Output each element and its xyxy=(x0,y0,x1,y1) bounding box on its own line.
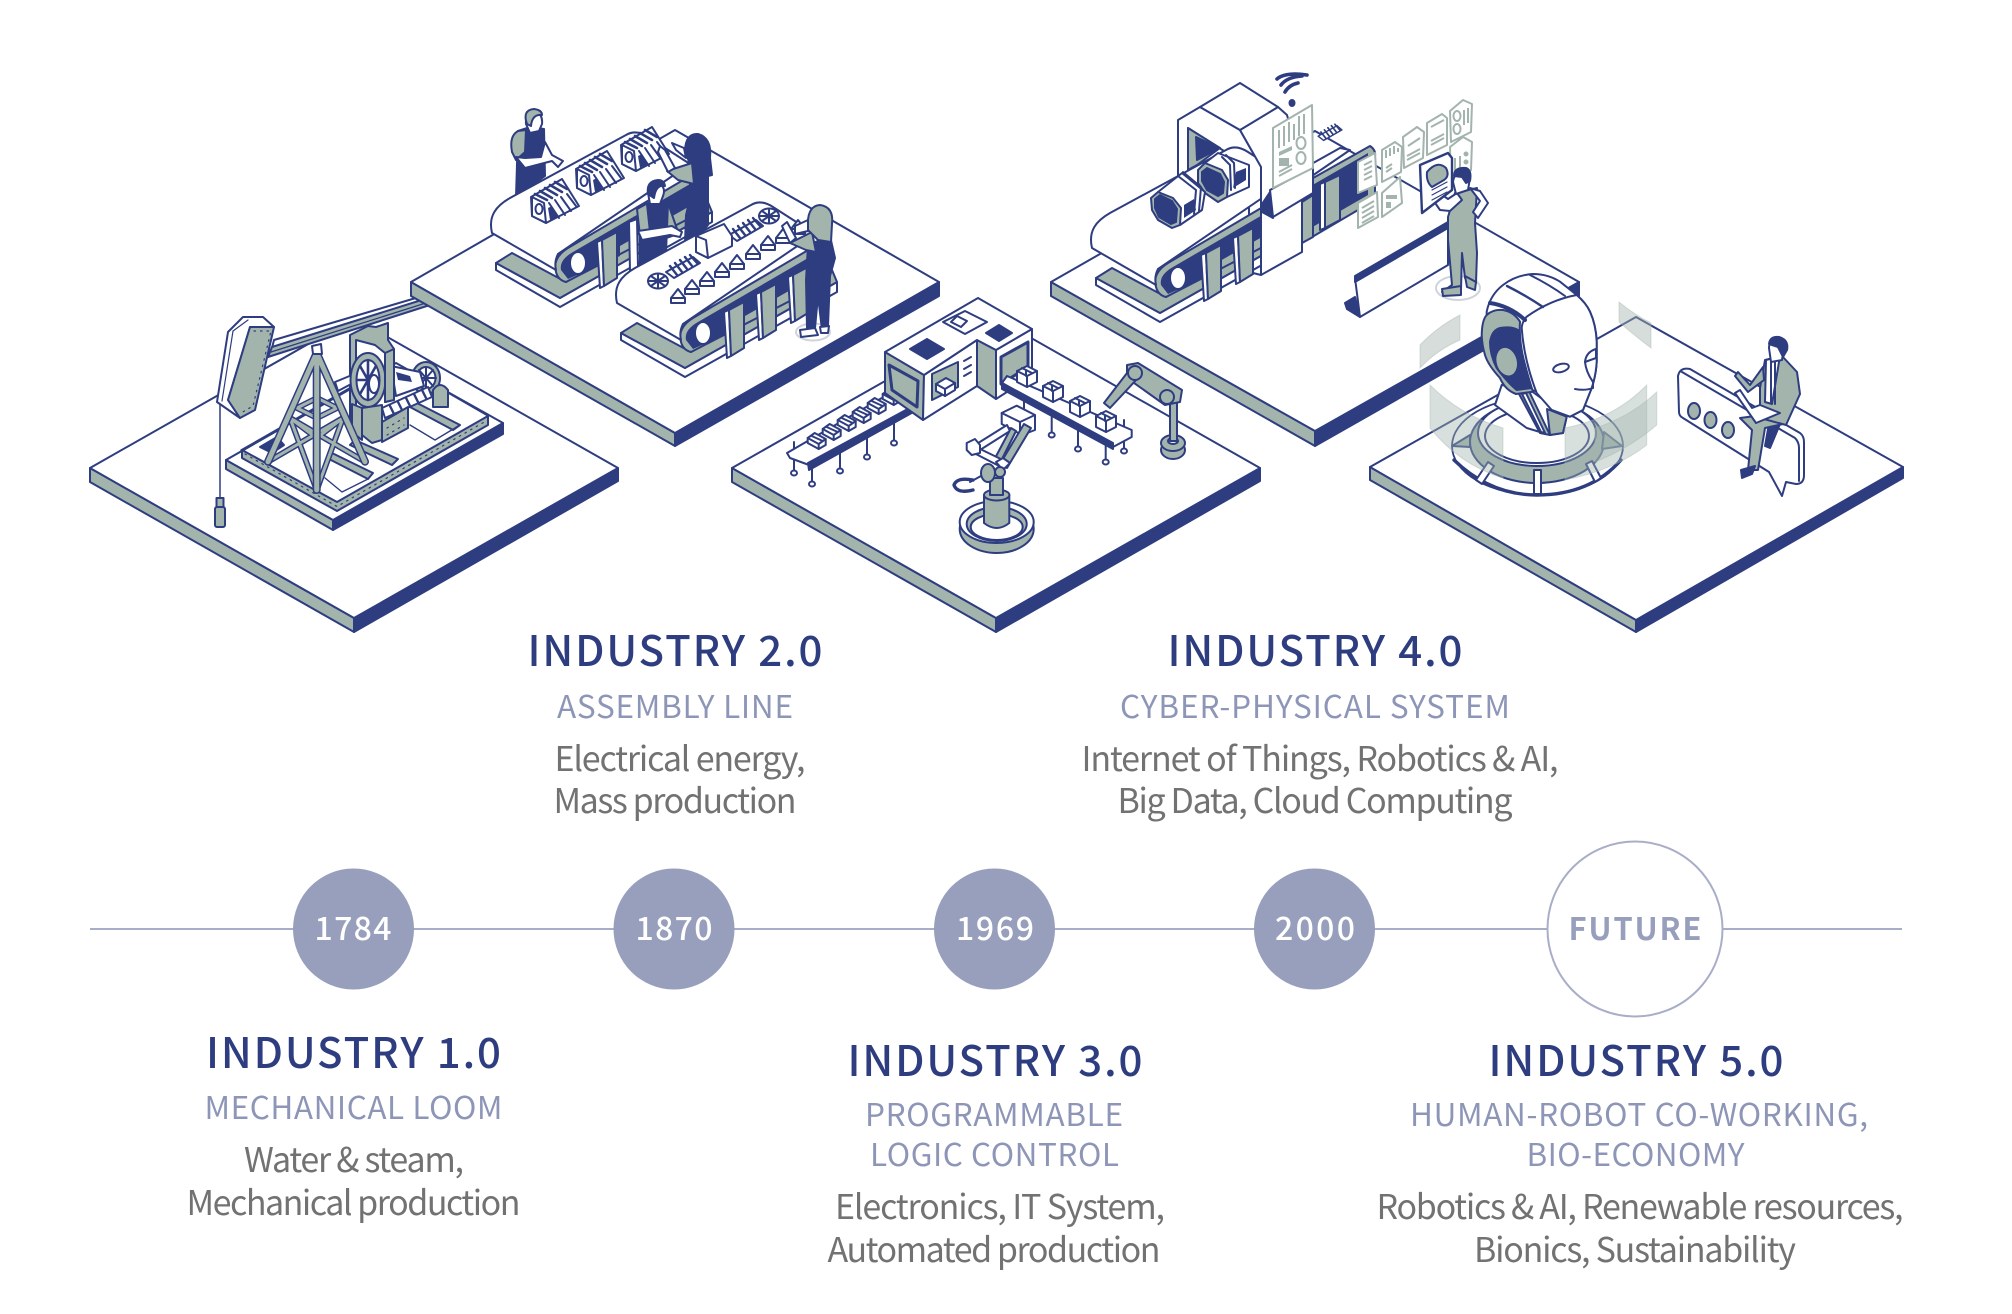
platform: Industry 5.0 xyxy=(1370,317,1903,632)
conveyor two xyxy=(616,202,837,377)
text block: Industry 4.0: Big Data, Cloud Computing xyxy=(1118,774,1512,823)
worker woman in navy xyxy=(658,134,712,243)
future marker xyxy=(1548,842,1722,1016)
text block: Industry 2.0: Electrical energy, xyxy=(554,732,806,781)
speech bubble xyxy=(1678,369,1804,496)
text block: Industry 2.0 xyxy=(528,618,822,823)
engine on conveyor behind gate xyxy=(1318,124,1342,140)
scanner gate rear xyxy=(1178,107,1261,275)
illustration: assembly line xyxy=(491,109,837,377)
robot base ring xyxy=(1452,397,1623,495)
conveyor two legs xyxy=(724,267,808,358)
conveyor legs left xyxy=(791,412,897,486)
cameras xyxy=(1151,153,1249,228)
pumpjack walking beam xyxy=(268,295,430,357)
year marker 1784: 1784 xyxy=(314,904,392,950)
worker in front of belt xyxy=(637,180,682,270)
centre robot arm xyxy=(954,406,1035,553)
dashboard main panel xyxy=(1273,105,1313,188)
year marker 1870: 1870 xyxy=(636,904,712,950)
year marker 1870 xyxy=(614,868,734,990)
left conveyor xyxy=(787,395,917,470)
worker woman at right xyxy=(782,205,835,340)
year marker 1784 xyxy=(293,868,414,990)
control machine xyxy=(885,298,1032,420)
text block: Industry 1.0 xyxy=(186,1020,520,1225)
platform: Industry 4.0 xyxy=(1051,131,1579,446)
year marker 1969 xyxy=(934,868,1055,990)
text block: Industry 4.0: INDUSTRY 4.0 xyxy=(1168,618,1462,679)
platform: Industry 1.0 xyxy=(90,318,618,632)
timeline xyxy=(90,842,1902,1016)
future marker: FUTURE xyxy=(1568,904,1702,949)
gantry robot arm xyxy=(1104,363,1185,459)
right conveyor xyxy=(1002,376,1132,449)
conveyor two parts: triangles, gears, coils and box xyxy=(648,208,805,303)
holographic panels behind xyxy=(1420,302,1651,368)
text block: Industry 5.0: INDUSTRY 5.0 xyxy=(1488,1028,1784,1089)
pumpjack rope and weight xyxy=(215,405,225,527)
conveyor one xyxy=(491,132,712,307)
text block: Industry 4.0: Internet of Things, Robotics & AI, xyxy=(1082,732,1558,781)
conveyor legs right xyxy=(1021,395,1127,464)
text block: Industry 2.0: ASSEMBLY LINE xyxy=(557,682,793,728)
smart conveyor xyxy=(1091,147,1312,322)
floating data panels xyxy=(1358,100,1472,228)
worker with apron at back xyxy=(511,109,563,197)
illustration: oil pumpjack xyxy=(215,295,503,530)
year marker 1969: 1969 xyxy=(956,904,1034,950)
text block: Industry 3.0: LOGIC CONTROL xyxy=(870,1130,1119,1176)
pumpjack base frame xyxy=(226,363,503,530)
text block: Industry 3.0: PROGRAMMABLE xyxy=(865,1090,1123,1136)
text block: Industry 5.0: BIO-ECONOMY xyxy=(1526,1130,1745,1176)
platform: Industry 3.0 xyxy=(732,318,1260,632)
gate front pillar and flap xyxy=(1200,83,1313,275)
text block: Industry 4.0: CYBER-PHYSICAL SYSTEM xyxy=(1120,682,1510,728)
illustration: human-robot co-working xyxy=(1420,274,1804,496)
text block: Industry 5.0: HUMAN-ROBOT CO-WORKING, xyxy=(1410,1090,1868,1136)
left conveyor boxes xyxy=(808,389,901,449)
illustration: automated production line xyxy=(787,298,1185,553)
year marker 2000 xyxy=(1254,868,1375,990)
wifi symbol xyxy=(1277,74,1307,107)
text block: Industry 3.0 xyxy=(828,1028,1165,1272)
text block: Industry 5.0 xyxy=(1376,1028,1904,1272)
holographic panels in front xyxy=(1430,385,1657,480)
pumpjack tower xyxy=(268,344,365,490)
conveyor one engines xyxy=(531,127,669,223)
robot head xyxy=(1482,274,1597,417)
text block: Industry 1.0: INDUSTRY 1.0 xyxy=(206,1020,501,1081)
year marker 2000: 2000 xyxy=(1275,904,1355,950)
text block: Industry 1.0: Water & steam, xyxy=(244,1133,464,1182)
pumpjack gearbox and wheels xyxy=(335,323,448,443)
text block: Industry 1.0: Mechanical production xyxy=(186,1176,520,1225)
right conveyor boxes xyxy=(1017,366,1116,432)
low wall xyxy=(1345,222,1448,317)
pumpjack horse head xyxy=(217,317,274,418)
smart conveyor extension xyxy=(1290,146,1375,250)
text block: Industry 2.0: INDUSTRY 2.0 xyxy=(528,618,822,679)
legs of smart conveyor xyxy=(1201,228,1253,301)
text block: Industry 5.0: Bionics, Sustainability xyxy=(1474,1223,1796,1272)
text block: Industry 2.0: Mass production xyxy=(554,774,796,823)
text block: Industry 3.0: INDUSTRY 3.0 xyxy=(848,1028,1142,1089)
engineer holding tablet xyxy=(1420,153,1488,300)
businessman with laptop xyxy=(1735,337,1800,478)
text block: Industry 3.0: Electronics, IT System, xyxy=(835,1180,1165,1229)
platform: Industry 2.0 xyxy=(411,130,939,446)
illustration: cyber-physical system xyxy=(1091,74,1488,322)
robot neck xyxy=(1495,385,1567,435)
text block: Industry 5.0: Robotics & AI, Renewable resources, xyxy=(1376,1180,1904,1229)
text block: Industry 1.0: MECHANICAL LOOM xyxy=(204,1083,502,1129)
text block: Industry 3.0: Automated production xyxy=(828,1223,1160,1272)
text block: Industry 4.0 xyxy=(1082,618,1558,823)
conveyor one legs xyxy=(597,219,638,288)
